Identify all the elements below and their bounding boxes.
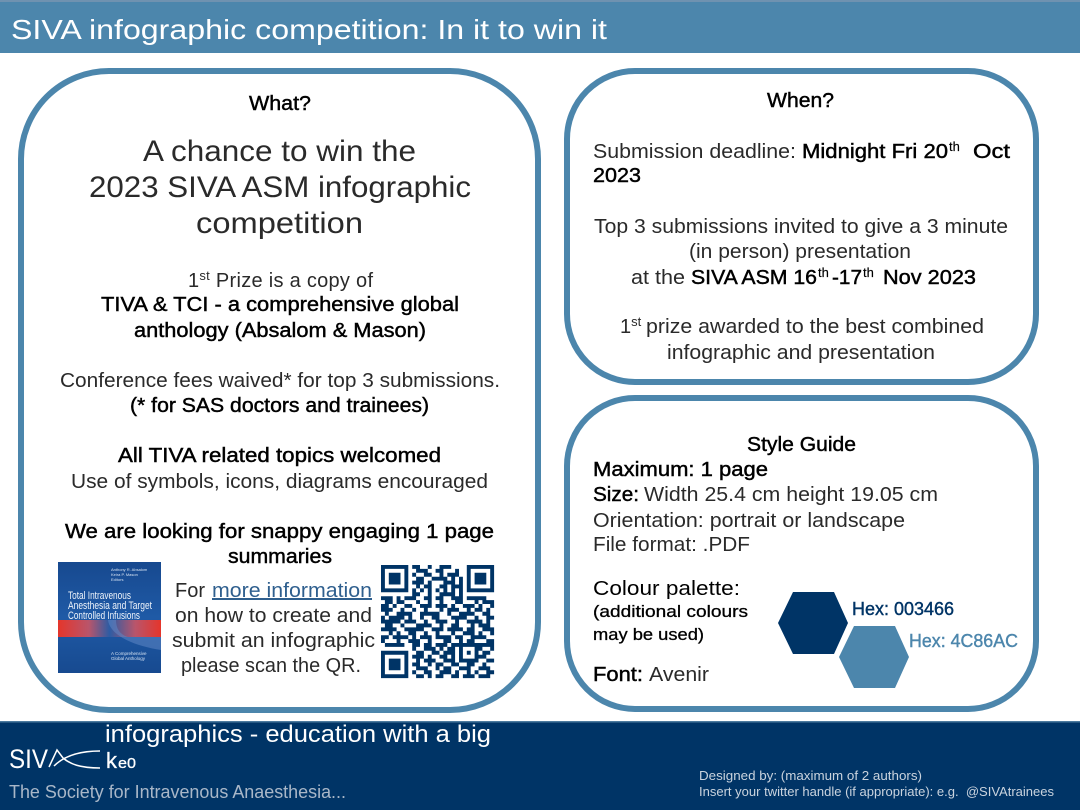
- footer tagline: infographics - education with a big: [105, 721, 491, 748]
- headline: A chance to win the: [143, 135, 416, 168]
- submission deadline: Submission deadline:: [593, 141, 796, 163]
- colour palette text: (additional colours: [593, 602, 748, 621]
- book cover: Global Anthology: [111, 656, 146, 661]
- conference fees text: [60, 370, 500, 417]
- prize text: Prize is a copy of: [210, 270, 373, 292]
- heading: what: What?: [249, 93, 311, 115]
- specifications: Orientation: portrait or landscape: [593, 510, 905, 532]
- panel: when: [567, 71, 1036, 382]
- font text: [593, 664, 709, 686]
- first prize award: st: [631, 314, 642, 329]
- presentation details: -17: [832, 267, 862, 289]
- submission deadline: [593, 139, 1011, 187]
- presentation details: (in person) presentation: [689, 241, 911, 263]
- more information text: on how to create and: [175, 605, 372, 627]
- submission deadline: Midnight Fri 20: [802, 141, 948, 163]
- specifications: File format: .PDF: [593, 534, 750, 556]
- author credits: Insert your twitter handle (if appropriate): e.g. @SIVAtrainees: [699, 784, 1054, 799]
- author credits: Designed by: (maximum of 2 authors): [699, 768, 922, 783]
- headline: [89, 135, 471, 240]
- book cover: Keira P. Mason: [111, 572, 138, 577]
- prize text: 1: [188, 270, 199, 292]
- ke0 label: [106, 748, 136, 773]
- presentation details: Nov 2023: [883, 267, 976, 289]
- presentation details: th: [863, 265, 874, 280]
- more information text: please scan the QR.: [181, 655, 361, 677]
- book cover: Total Intravenous: [68, 590, 131, 602]
- book cover: Anthony R. Absalom: [111, 567, 148, 572]
- headline: competition: [196, 207, 363, 240]
- topics text: All TIVA related topics welcomed: [118, 445, 441, 467]
- SIVA logo: [9, 744, 100, 774]
- summaries text: We are looking for snappy engaging 1 page: [65, 521, 494, 543]
- SIVA logo: SIV: [9, 744, 48, 774]
- specifications: Width 25.4 cm height 19.05 cm: [644, 484, 938, 506]
- book cover: Controlled Infusions: [68, 610, 140, 622]
- book cover: A Comprehensive: [111, 651, 147, 656]
- first prize award: [620, 314, 984, 364]
- ke0 label: k: [106, 748, 118, 773]
- presentation details: [594, 216, 1008, 289]
- author credits: [699, 768, 1054, 799]
- footer bar: [0, 721, 1080, 810]
- panel: style guide: [567, 398, 1036, 709]
- presentation details: Top 3 submissions invited to give a 3 minute: [594, 216, 1008, 238]
- submission deadline: Oct: [973, 141, 1011, 163]
- submission deadline: 2023: [593, 165, 641, 187]
- presentation details: SIVA ASM 16: [691, 267, 817, 289]
- colour palette text: [593, 578, 748, 644]
- ke0 label: e0: [118, 755, 136, 772]
- headline: 2023 SIVA ASM infographic: [89, 171, 471, 204]
- specifications: Maximum: 1 page: [593, 459, 768, 481]
- heading: when: When?: [767, 90, 834, 112]
- prize text: [101, 268, 459, 342]
- topics text: Use of symbols, icons, diagrams encouraged: [71, 471, 488, 493]
- first prize award: infographic and presentation: [667, 342, 935, 364]
- title: SIVA infographic competition: In it to win it: [11, 14, 607, 45]
- label: light hex: Hex: 4C86AC: [909, 631, 1018, 651]
- font text: Avenir: [649, 664, 709, 686]
- colour palette text: Colour palette:: [593, 578, 740, 600]
- book cover: Anesthesia and Target: [68, 600, 152, 612]
- more information text: submit an infographic: [172, 630, 375, 652]
- first prize award: prize awarded to the best combined: [646, 316, 984, 338]
- summaries text: summaries: [228, 546, 332, 568]
- more information text: [172, 580, 375, 677]
- icon: dark hexagon: [778, 592, 848, 654]
- font text: Font:: [593, 664, 643, 686]
- book cover: Editors: [111, 577, 123, 582]
- topics text: [71, 445, 488, 493]
- presentation details: at the: [631, 267, 685, 289]
- prize text: anthology (Absalom & Mason): [134, 320, 426, 342]
- summaries text: [65, 521, 494, 568]
- more information text: more information: [212, 580, 372, 602]
- colour palette text: may be used): [593, 625, 704, 644]
- conference fees text: (* for SAS doctors and trainees): [130, 395, 429, 417]
- presentation details: th: [818, 265, 829, 280]
- heading: style guide: Style Guide: [747, 434, 856, 456]
- header bar: [0, 0, 1080, 53]
- icon: light hexagon: [839, 626, 909, 688]
- specifications: Size:: [593, 484, 639, 506]
- prize text: TIVA & TCI - a comprehensive global: [101, 294, 459, 316]
- society name: The Society for Intravenous Anaesthesia...: [9, 782, 346, 802]
- more information text: For: [175, 580, 205, 602]
- first prize award: 1: [620, 316, 631, 338]
- panel: what: [21, 71, 538, 710]
- book cover: [58, 562, 161, 673]
- QR code: [381, 567, 494, 676]
- prize text: st: [199, 268, 210, 283]
- submission deadline: th: [949, 139, 960, 154]
- conference fees text: Conference fees waived* for top 3 submissions.: [60, 370, 500, 392]
- specifications: [593, 459, 938, 556]
- label: dark hex: Hex: 003466: [852, 599, 954, 619]
